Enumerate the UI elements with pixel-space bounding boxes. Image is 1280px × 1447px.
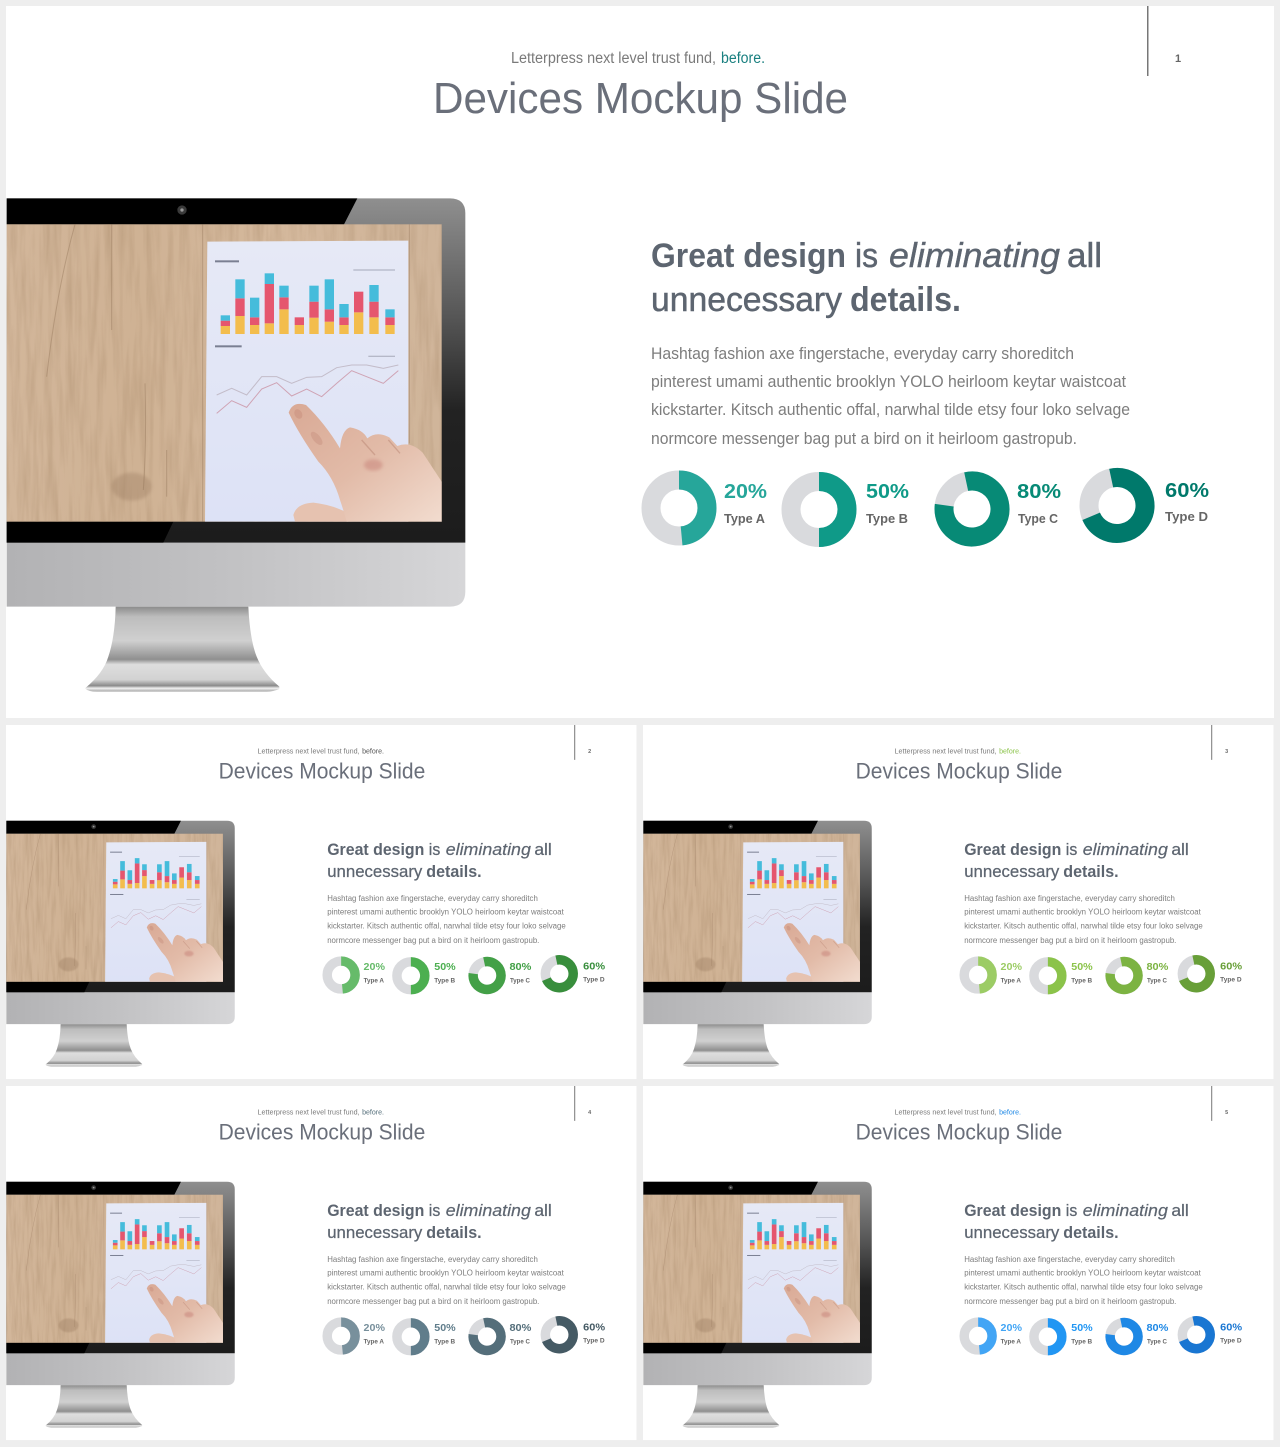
body text: normcore messenger bag put a bird on it heirloom gastropub. [651, 430, 1077, 448]
donut: Type D: Type D [583, 1337, 605, 1344]
heading: details. [1063, 862, 1119, 881]
heading: is [429, 840, 440, 859]
donut: Type C: 80% [509, 1323, 532, 1334]
icon: desktop monitor mockup [7, 198, 465, 692]
heading [327, 1201, 552, 1242]
page number: 1 [1175, 53, 1181, 65]
page number [1211, 1086, 1228, 1121]
body text: pinterest umami authentic brooklyn YOLO heirloom keytar waistcoat [327, 1269, 564, 1278]
donut: Type D: 60% [1220, 1323, 1242, 1334]
donut: Type A: Type A [1001, 977, 1021, 984]
body text: normcore messenger bag put a bird on it heirloom gastropub. [327, 936, 539, 945]
subtitle: before. [362, 1107, 384, 1116]
heading: unnecessary [964, 862, 1060, 881]
body text: kickstarter. Kitsch authentic offal, narwhal tilde etsy four loko selvage [964, 922, 1203, 931]
donut: Type D: 60% [1220, 962, 1242, 973]
donut: Type B: 50% [1071, 962, 1093, 973]
donut: Type D: 60% [583, 1323, 605, 1334]
page number [1211, 725, 1228, 760]
body text: Hashtag fashion axe fingerstache, everyday carry shoreditch [327, 1255, 538, 1264]
donut: Type D: Type D [583, 976, 605, 983]
heading [964, 1201, 1189, 1242]
donut: Type A [327, 1322, 385, 1350]
donut: Type B: Type B [1071, 1338, 1093, 1345]
donut: Type B: Type B [434, 1338, 456, 1345]
donut: Type D: Type D [1220, 1337, 1242, 1344]
heading: details. [426, 1223, 482, 1242]
page number [574, 725, 591, 760]
title: Devices Mockup Slide [433, 74, 848, 123]
donut: Type A [327, 961, 385, 989]
donut: Type A: 20% [1001, 962, 1022, 973]
donut: Type D: 60% [1165, 480, 1209, 502]
donut: Type C: 80% [1146, 1323, 1169, 1334]
heading: Great design [327, 1201, 424, 1220]
donut: Type A: 20% [724, 481, 767, 503]
panel: slide 3 light green [643, 725, 1273, 1079]
title: Devices Mockup Slide [856, 1119, 1062, 1144]
donut: Type C [939, 476, 1061, 542]
body text [327, 894, 566, 945]
donut: Type A [651, 480, 767, 536]
donut: Type D [543, 1318, 605, 1351]
page number: 2 [588, 749, 591, 755]
donut: Type C: 80% [1017, 481, 1061, 503]
title: Devices Mockup Slide [219, 1119, 425, 1144]
heading: unnecessary [327, 862, 423, 881]
heading: all [1067, 237, 1102, 275]
donut: Type B: 50% [434, 962, 456, 973]
icon: desktop monitor mockup [643, 1182, 872, 1427]
body text: Hashtag fashion axe fingerstache, everyday carry shoreditch [651, 345, 1074, 363]
body text: normcore messenger bag put a bird on it heirloom gastropub. [964, 936, 1176, 945]
donut: Type C: 80% [1146, 962, 1169, 973]
title: Devices Mockup Slide [219, 758, 425, 783]
donut: Type B [397, 962, 456, 990]
heading: details. [850, 281, 961, 319]
heading: eliminating [1083, 840, 1168, 859]
donut: Type B: 50% [434, 1323, 456, 1334]
body text: kickstarter. Kitsch authentic offal, narwhal tilde etsy four loko selvage [327, 1283, 566, 1292]
page number: 3 [1225, 749, 1228, 755]
donut: Type D [1180, 1318, 1242, 1351]
subtitle: before. [999, 746, 1021, 755]
donut: Type A: 20% [364, 1323, 385, 1334]
body text: pinterest umami authentic brooklyn YOLO heirloom keytar waistcoat [964, 1269, 1201, 1278]
title: Devices Mockup Slide [856, 758, 1062, 783]
donut: Type B [1034, 1323, 1093, 1351]
heading: is [1066, 1201, 1077, 1220]
donut: Type A [964, 961, 1022, 989]
donut: Type C: Type C [510, 977, 530, 984]
donut: Type C: Type C [1018, 511, 1059, 526]
donut: Type D: Type D [1220, 976, 1242, 983]
heading: all [534, 1201, 552, 1220]
body text: kickstarter. Kitsch authentic offal, narwhal tilde etsy four loko selvage [964, 1283, 1203, 1292]
subtitle: before. [721, 50, 765, 67]
donut: Type B: Type B [434, 977, 456, 984]
donut: Type B [1034, 962, 1093, 990]
heading: all [534, 840, 552, 859]
donut: Type D: 60% [583, 962, 605, 973]
donut: Type C [471, 1320, 532, 1353]
heading [964, 840, 1189, 881]
panel: slide 4 blue grey [6, 1086, 636, 1440]
subtitle: Letterpress next level trust fund, [894, 746, 997, 755]
subtitle: Letterpress next level trust fund, [511, 50, 716, 67]
icon: desktop monitor mockup [643, 821, 872, 1066]
heading: is [429, 1201, 440, 1220]
heading: eliminating [446, 840, 531, 859]
heading: Great design [327, 840, 424, 859]
heading: unnecessary [327, 1223, 423, 1242]
donut: Type D [1180, 957, 1242, 990]
heading: Great design [964, 840, 1061, 859]
heading: Great design [651, 237, 846, 275]
page number: 4 [588, 1110, 592, 1116]
donut: Type C [1108, 959, 1169, 992]
page number [574, 1086, 592, 1121]
subtitle: Letterpress next level trust fund, [257, 746, 360, 755]
subtitle: before. [362, 746, 384, 755]
donut: Type C: 80% [509, 962, 532, 973]
panel: slide 5 blue [643, 1086, 1273, 1440]
donut: Type A: Type A [364, 1338, 384, 1345]
panel: slide 2 green [6, 725, 636, 1079]
donut: Type B: Type B [1071, 977, 1093, 984]
donut: Type D [1084, 472, 1209, 539]
heading: is [855, 237, 878, 275]
icon: desktop monitor mockup [6, 1182, 235, 1427]
body text: normcore messenger bag put a bird on it heirloom gastropub. [964, 1297, 1176, 1306]
donut: Type C [1108, 1320, 1169, 1353]
body text: pinterest umami authentic brooklyn YOLO heirloom keytar waistcoat [327, 908, 564, 917]
heading: eliminating [446, 1201, 531, 1220]
heading: all [1171, 840, 1189, 859]
page number [1147, 6, 1181, 76]
body text: Hashtag fashion axe fingerstache, everyday carry shoreditch [327, 894, 538, 903]
donut: Type C [471, 959, 532, 992]
body text [964, 1255, 1203, 1306]
body text: pinterest umami authentic brooklyn YOLO heirloom keytar waistcoat [651, 373, 1126, 391]
donut: Type A: Type A [364, 977, 384, 984]
body text: kickstarter. Kitsch authentic offal, narwhal tilde etsy four loko selvage [327, 922, 566, 931]
donut: Type D [543, 957, 605, 990]
heading: all [1171, 1201, 1189, 1220]
body text: kickstarter. Kitsch authentic offal, narwhal tilde etsy four loko selvage [651, 401, 1130, 419]
heading [651, 237, 1102, 319]
page number: 5 [1225, 1110, 1228, 1116]
donut: Type A: Type A [1001, 1338, 1021, 1345]
body text [327, 1255, 566, 1306]
donut: Type B [791, 481, 909, 538]
donut: Type B: Type B [866, 511, 908, 526]
heading: details. [1063, 1223, 1119, 1242]
donut: Type C: Type C [1147, 977, 1167, 984]
body text: pinterest umami authentic brooklyn YOLO heirloom keytar waistcoat [964, 908, 1201, 917]
subtitle: before. [999, 1107, 1021, 1116]
donut: Type C: Type C [1147, 1338, 1167, 1345]
donut: Type D: Type D [1165, 509, 1208, 524]
heading: eliminating [889, 237, 1060, 275]
panel: slide 1 large teal [6, 6, 1274, 718]
body text: Hashtag fashion axe fingerstache, everyday carry shoreditch [964, 894, 1175, 903]
heading: details. [426, 862, 482, 881]
subtitle: Letterpress next level trust fund, [894, 1107, 997, 1116]
donut: Type A [964, 1322, 1022, 1350]
donut: Type C: Type C [510, 1338, 530, 1345]
heading: unnecessary [651, 281, 842, 319]
body text [964, 894, 1203, 945]
heading: is [1066, 840, 1077, 859]
donut: Type B: 50% [866, 481, 909, 503]
body text [651, 345, 1130, 448]
icon: desktop monitor mockup [6, 821, 235, 1066]
donut: Type B [397, 1323, 456, 1351]
subtitle: Letterpress next level trust fund, [257, 1107, 360, 1116]
heading: Great design [964, 1201, 1061, 1220]
donut: Type A: 20% [1001, 1323, 1022, 1334]
heading [327, 840, 552, 881]
heading: eliminating [1083, 1201, 1168, 1220]
body text: normcore messenger bag put a bird on it heirloom gastropub. [327, 1297, 539, 1306]
heading: unnecessary [964, 1223, 1060, 1242]
donut: Type A: Type A [724, 511, 766, 526]
donut: Type A: 20% [364, 962, 385, 973]
donut: Type B: 50% [1071, 1323, 1093, 1334]
body text: Hashtag fashion axe fingerstache, everyday carry shoreditch [964, 1255, 1175, 1264]
